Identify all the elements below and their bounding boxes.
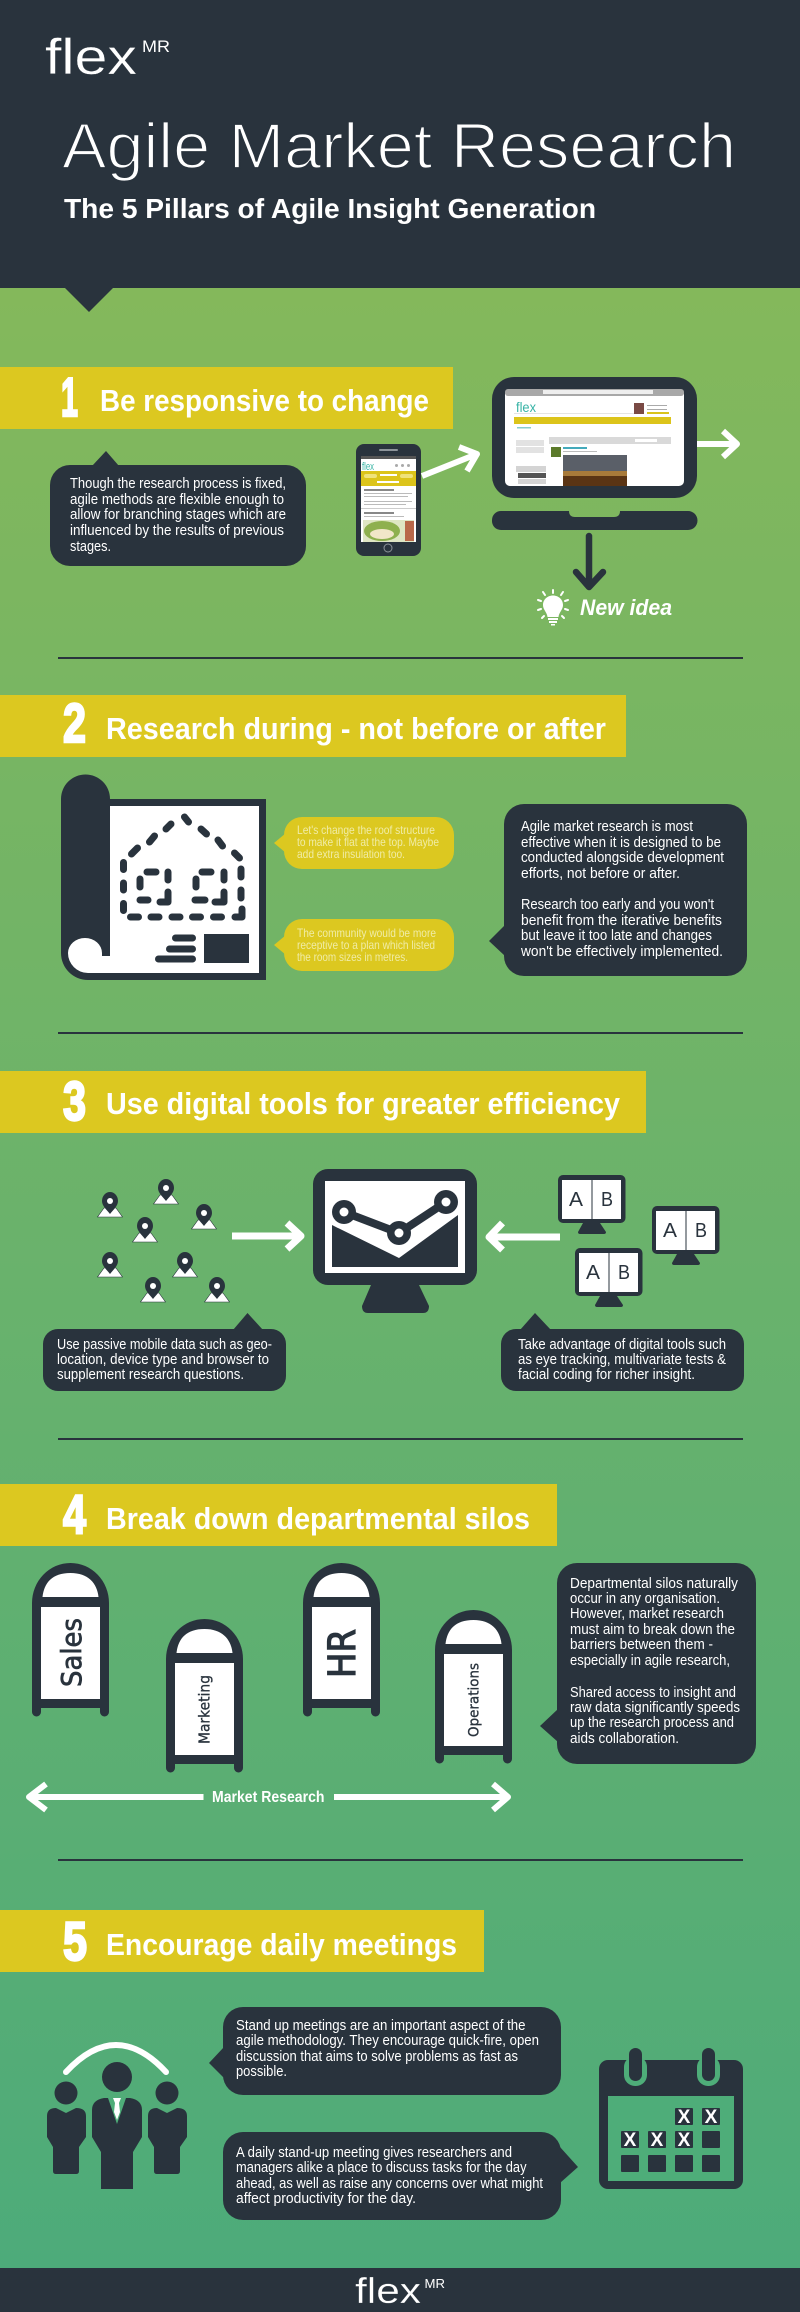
callout: passive mobile data xyxy=(43,1313,286,1391)
sign: Marketing: Marketing xyxy=(196,1675,214,1744)
icon: A/B monitor 1: A xyxy=(569,1189,584,1211)
icon: calendar: X xyxy=(678,2107,691,2128)
sign: Sales: Sales xyxy=(55,1618,88,1687)
callout: responsive: Though the research process is fixed, xyxy=(70,476,286,492)
sign: Marketing xyxy=(166,1619,243,1772)
callout: silos: barriers between them - xyxy=(570,1637,713,1653)
callout: research timing: efforts, not before or after. xyxy=(521,866,680,882)
icon: calendar xyxy=(599,2048,743,2189)
callout: research timing: conducted alongside development xyxy=(521,850,724,866)
section 5 heading: Encourage daily meetings xyxy=(106,1927,457,1962)
callout: passive mobile data: location, device type and browser to xyxy=(57,1352,269,1368)
section 1 heading: 1 xyxy=(61,366,78,428)
callout: stand up meetings: Stand up meetings are an important aspect of the xyxy=(236,2018,526,2034)
icon: calendar: X xyxy=(651,2130,664,2151)
callout: daily stand-up: affect productivity for the day. xyxy=(236,2191,416,2207)
arrow: tests to monitor xyxy=(489,1223,560,1250)
icon: calendar: X xyxy=(624,2130,637,2151)
logo: flexMR xyxy=(45,29,170,85)
icon: calendar: X xyxy=(678,2130,691,2151)
callout: research timing xyxy=(489,804,747,976)
section 5 heading xyxy=(0,1910,484,1972)
callout: research timing: Agile market research is most xyxy=(521,819,693,835)
arrow: phone to laptop xyxy=(422,447,477,476)
callout: digital tools: as eye tracking, multivariate tests & xyxy=(518,1352,726,1368)
icon: calendar: X xyxy=(705,2107,718,2128)
callout: daily stand-up: managers alike a place to discuss tasks for the day xyxy=(236,2160,527,2176)
callout: passive mobile data: Use passive mobile data such as geo- xyxy=(57,1337,272,1353)
icon: laptop xyxy=(492,377,698,530)
section 2 heading xyxy=(0,692,626,757)
section 4 heading xyxy=(0,1483,557,1546)
section 3 heading: 3 xyxy=(63,1070,86,1132)
callout: community comment: the room sizes in metres. xyxy=(297,950,408,964)
callout: silos: Departmental silos naturally xyxy=(570,1576,739,1592)
callout: responsive xyxy=(50,451,306,566)
callout: daily stand-up: ahead, as well as raise any concerns over what might xyxy=(236,2176,543,2192)
callout: daily stand-up xyxy=(223,2132,578,2220)
icon: A/B monitor 1: B xyxy=(601,1189,613,1211)
callout: silos: especially in agile research, xyxy=(570,1653,730,1669)
logo: flexMR: flex xyxy=(45,29,137,85)
callout: silos: raw data significantly speeds xyxy=(570,1700,740,1716)
icon: monitor with chart xyxy=(313,1169,477,1313)
section 4 heading: Break down departmental silos xyxy=(106,1501,530,1536)
callout: responsive: influenced by the results of previous xyxy=(70,523,284,539)
icon: A/B monitor 3 xyxy=(575,1248,642,1307)
callout: community comment: receptive to a plan which listed xyxy=(297,938,435,952)
callout: silos: aids collaboration. xyxy=(570,1731,679,1747)
sign: Sales xyxy=(32,1563,109,1716)
label: market research: Market Research xyxy=(212,1789,324,1806)
callout: silos: occur in any organisation. xyxy=(570,1591,720,1607)
sign: HR xyxy=(303,1563,380,1716)
section 3 heading: Use digital tools for greater efficiency xyxy=(106,1086,621,1121)
header panel xyxy=(0,0,800,312)
icon: team of three people xyxy=(47,2045,187,2189)
sign: Operations xyxy=(435,1610,512,1764)
icon: A/B monitor 2: A xyxy=(663,1220,678,1242)
section 1 heading: Be responsive to change xyxy=(100,383,429,418)
icon: phone: flex xyxy=(362,461,374,473)
icon: A/B monitor 2: B xyxy=(695,1220,707,1242)
icon: A/B monitor 2 xyxy=(652,1206,720,1265)
icon: A/B monitor 1 xyxy=(558,1175,626,1234)
callout: silos xyxy=(540,1563,756,1764)
subtitle: The 5 Pillars of Agile Insight Generation xyxy=(64,193,596,224)
callout: passive mobile data: supplement research questions. xyxy=(57,1367,244,1383)
footer logo: MR xyxy=(424,2277,445,2291)
callout: community comment xyxy=(274,919,454,971)
icon: A/B monitor 3: A xyxy=(586,1262,601,1284)
callout: research timing: effective when it is designed to be xyxy=(521,835,721,851)
title: Agile Market Research xyxy=(62,110,736,182)
callout: stand up meetings: agile methodology. They encourage quick-fire, open xyxy=(236,2033,539,2049)
icon: blueprint xyxy=(61,775,266,980)
callout: research timing: won't be effectively implemented. xyxy=(520,944,723,960)
section 4 heading: 4 xyxy=(63,1483,86,1545)
callout: roof comment: add extra insulation too. xyxy=(297,847,405,861)
callout: digital tools: facial coding for richer insight. xyxy=(518,1367,695,1383)
section 2 heading: Research during - not before or after xyxy=(106,711,606,746)
callout: community comment: The community would be more xyxy=(297,926,436,940)
callout: daily stand-up: A daily stand-up meeting gives researchers and xyxy=(236,2145,512,2161)
section 2 heading: 2 xyxy=(63,692,86,754)
sign: Operations: Operations xyxy=(466,1663,482,1737)
icon: A/B monitor 3: B xyxy=(618,1262,630,1284)
sign: HR: HR xyxy=(321,1629,364,1678)
section 1 heading xyxy=(0,366,453,429)
label: new idea: New idea xyxy=(580,595,672,620)
arrow: market research double-headed xyxy=(29,1784,508,1810)
arrow: pins to monitor xyxy=(232,1223,301,1249)
icon: light bulb xyxy=(538,590,568,626)
callout: research timing: Research too early and you won't xyxy=(521,897,714,913)
icon: laptop: flex xyxy=(516,399,536,415)
callout: digital tools xyxy=(501,1313,744,1391)
callout: responsive: agile methods are flexible enough to xyxy=(70,492,284,508)
callout: roof comment: Let's change the roof structure xyxy=(297,823,435,837)
callout: research timing: benefit from the iterative benefits xyxy=(521,913,722,929)
callout: responsive: stages. xyxy=(70,539,111,555)
callout: digital tools: Take advantage of digital tools such xyxy=(518,1337,726,1353)
footer logo: flex xyxy=(355,2270,421,2311)
icons: location pins xyxy=(98,1179,230,1302)
callout: stand up meetings: discussion that aims to solve problems as fast as xyxy=(236,2049,518,2065)
footer logo xyxy=(355,2270,445,2311)
callout: silos: must aim to break down the xyxy=(570,1622,735,1638)
callout: responsive: allow for branching stages which are xyxy=(70,507,286,523)
callout: silos: Shared access to insight and xyxy=(570,1685,736,1701)
callout: stand up meetings: possible. xyxy=(236,2064,287,2080)
icon: phone xyxy=(356,444,421,556)
section 5 heading: 5 xyxy=(63,1910,87,1972)
logo: flexMR: MR xyxy=(142,38,170,56)
callout: silos: up the research process and xyxy=(570,1715,734,1731)
callout: stand up meetings xyxy=(209,2007,561,2095)
arrow: laptop output xyxy=(697,431,737,457)
footer xyxy=(0,2268,800,2312)
callout: roof comment: to make it flat at the top. Maybe xyxy=(297,835,439,849)
callout: silos: However, market research xyxy=(570,1606,724,1622)
arrow: down to new idea xyxy=(576,536,603,587)
callout: research timing: but leave it too late and changes xyxy=(521,928,712,944)
callout: roof comment xyxy=(274,817,454,869)
section 3 heading xyxy=(0,1070,646,1133)
